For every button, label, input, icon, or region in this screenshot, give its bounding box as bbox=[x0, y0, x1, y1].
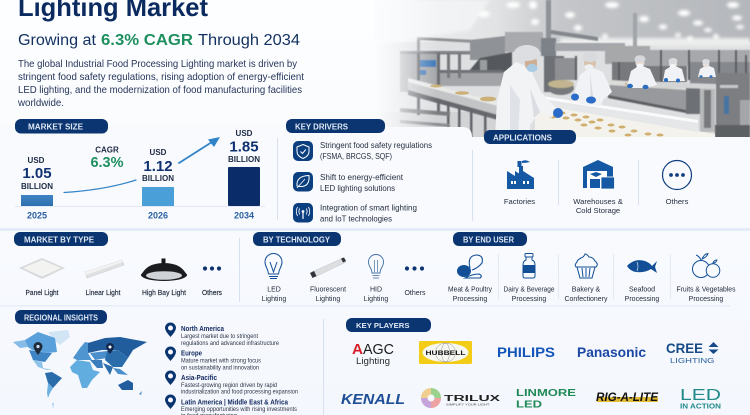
icon: meat and poultry bbox=[457, 255, 482, 278]
label: warehouses and cold storage: Cold Storage bbox=[576, 206, 620, 215]
worker 3 bbox=[627, 55, 657, 89]
heading: market by type bbox=[14, 232, 108, 246]
region: latin america, middle east and africa: Latin America | Middle East & Africa bbox=[181, 398, 289, 406]
text: led lighting: LED bbox=[267, 286, 281, 294]
text: energy efficient: LED lighting solutions bbox=[320, 184, 395, 193]
text: led lighting bbox=[262, 286, 286, 303]
bar chart: 1.05 bbox=[22, 165, 52, 182]
label: high bay light: High Bay Light bbox=[142, 290, 186, 297]
region: europe bbox=[165, 346, 261, 372]
region: north america bbox=[165, 322, 280, 347]
label: factories: Factories bbox=[504, 197, 535, 206]
subtitle: 6.3% CAGR bbox=[101, 32, 193, 49]
logo: Linmore LED: LED bbox=[516, 398, 543, 410]
logo: Trilux: TRILUX bbox=[444, 394, 501, 403]
text: seafood: Seafood bbox=[629, 286, 655, 294]
heading: by technology bbox=[253, 232, 341, 246]
heading: by end user: BY END USER bbox=[463, 236, 514, 244]
logo: Linmore LED: LINMORE bbox=[516, 387, 576, 399]
icon: linear light bbox=[85, 260, 124, 278]
icon: wireless bbox=[293, 203, 313, 222]
text: meat and poultry bbox=[448, 286, 492, 303]
logo: LED in Action: LED bbox=[680, 387, 721, 404]
region: asia-pacific: Fastest-growing region driven by rapid bbox=[181, 383, 277, 389]
photo fade bbox=[375, 0, 434, 127]
logo: AAGC Lighting: Lighting bbox=[356, 356, 390, 367]
label: others: Others bbox=[666, 197, 689, 206]
region: asia-pacific bbox=[165, 371, 298, 396]
text: regulations bbox=[320, 141, 432, 161]
region: asia-pacific: industrialization and food processing expansion bbox=[181, 390, 298, 396]
region: latin america, middle east and africa: Emerging opportunities with rising investments bbox=[181, 407, 297, 413]
worker 5 bbox=[698, 59, 716, 78]
text: meat and poultry: Processing bbox=[453, 296, 487, 303]
text: fruits and vegetables bbox=[676, 286, 736, 303]
text: smart lighting bbox=[320, 204, 417, 224]
heading: regional insights: REGIONAL INSIGHTS bbox=[24, 314, 99, 322]
panel: market by type bbox=[14, 232, 240, 302]
logo: LED in Action: IN ACTION bbox=[680, 404, 721, 410]
panel: by end user bbox=[448, 232, 736, 303]
text: bakery and confectionery: Bakery & bbox=[572, 286, 601, 294]
arrow: growth curve bbox=[64, 137, 220, 192]
label: warehouses and cold storage bbox=[573, 197, 623, 215]
icon: hid bulb bbox=[368, 254, 384, 278]
conveyor belt with pastries bbox=[430, 84, 715, 138]
logo: Hubbell bbox=[419, 341, 472, 364]
bar chart: 2026 bbox=[148, 210, 168, 220]
region: latin america, middle east and africa bbox=[165, 394, 297, 415]
bar chart: USD bbox=[236, 129, 253, 138]
panel: key players bbox=[341, 318, 721, 410]
text: fruits and vegetables: Processing bbox=[689, 296, 723, 303]
text: dairy and beverage: Processing bbox=[512, 296, 546, 303]
label: panel light: Panel Light bbox=[26, 290, 59, 297]
heading: applications bbox=[484, 130, 576, 144]
region: europe: Mature market with strong focus bbox=[181, 358, 261, 364]
text: regulations: (FSMA, BRCGS, SQF) bbox=[320, 152, 392, 161]
bar chart bbox=[15, 129, 265, 220]
text: dairy and beverage: Dairy & Beverage bbox=[504, 286, 555, 294]
logo: Trilux bbox=[421, 388, 501, 408]
icon: warehouse bbox=[583, 160, 614, 189]
icon: fish bbox=[627, 260, 657, 273]
icon: fluorescent tube bbox=[310, 258, 346, 278]
panel: regional insights bbox=[13, 310, 324, 415]
worker 1 bbox=[495, 45, 563, 138]
text: fluorescent lighting: Fluorescent bbox=[310, 286, 346, 294]
heading: by technology: BY TECHNOLOGY bbox=[263, 236, 331, 244]
icon: shield bbox=[293, 141, 313, 161]
logo: Linmore LED bbox=[516, 387, 576, 410]
bar chart: 1.12 bbox=[143, 158, 173, 175]
heading: key players: KEY PLAYERS bbox=[356, 321, 410, 330]
heading: market by type: MARKET BY TYPE bbox=[24, 236, 95, 244]
intro paragraph: The global Industrial Food Processing Lighting market is driven by bbox=[18, 59, 298, 70]
text: regulations: Stringent food safety regulations bbox=[320, 141, 432, 150]
icon: fruits and vegetables bbox=[692, 254, 720, 278]
logo: AAGC Lighting bbox=[352, 341, 394, 367]
icon: panel light bbox=[19, 258, 65, 279]
bar chart: BILLION bbox=[142, 174, 174, 183]
callout: CAGR: 6.3% bbox=[90, 155, 124, 171]
text: smart lighting: Integration of smart lighting bbox=[320, 204, 417, 212]
subtitle: Through 2034 bbox=[198, 32, 300, 49]
bar chart: 1.85 bbox=[229, 138, 259, 156]
heading: by end user bbox=[453, 232, 527, 246]
logo: Hubbell: HUBBELL bbox=[426, 350, 466, 357]
heading: applications: APPLICATIONS bbox=[493, 134, 553, 142]
heading: regional insights bbox=[15, 310, 107, 324]
label: linear light: Linear Light bbox=[86, 290, 121, 297]
text: dairy and beverage bbox=[504, 286, 555, 303]
worker 2 bbox=[571, 60, 612, 106]
logo: Trilux: SIMPLIFY YOUR LIGHT. bbox=[446, 402, 490, 406]
bar chart: BILLION bbox=[21, 182, 53, 191]
bar chart: USD bbox=[28, 156, 45, 165]
logo: LED in Action bbox=[680, 387, 721, 410]
panel: applications bbox=[472, 130, 692, 221]
photo: workers on food processing line bbox=[375, 0, 750, 138]
text: fluorescent lighting bbox=[310, 286, 346, 303]
region: north america: Largest market due to stringent bbox=[181, 334, 258, 340]
panel: top row background bbox=[0, 125, 750, 228]
label: others: Others bbox=[202, 290, 222, 297]
heading: key drivers: KEY DRIVERS bbox=[295, 122, 349, 132]
region: north america: regulations and advanced infrastructure bbox=[181, 341, 280, 347]
text: smart lighting: and IoT technologies bbox=[320, 214, 392, 224]
heading: key players bbox=[346, 318, 431, 332]
icon: factory bbox=[507, 160, 534, 189]
text: energy efficient bbox=[320, 173, 404, 193]
text: led lighting: Lighting bbox=[262, 296, 286, 303]
text: fluorescent lighting: Lighting bbox=[316, 296, 340, 303]
text: seafood bbox=[625, 286, 659, 303]
world map bbox=[13, 330, 147, 409]
bar chart: USD bbox=[150, 148, 167, 157]
intro paragraph: worldwide. bbox=[17, 98, 64, 109]
text: hid lighting: Lighting bbox=[364, 296, 388, 303]
text: meat and poultry: Meat & Poultry bbox=[448, 286, 492, 294]
callout: CAGR bbox=[90, 146, 124, 171]
text: hid lighting bbox=[364, 286, 388, 303]
logo: AAGC Lighting: A bbox=[352, 341, 363, 358]
icon: others circle bbox=[662, 160, 692, 190]
icon: bottle bbox=[523, 254, 535, 278]
bar chart: BILLION bbox=[228, 155, 260, 164]
subtitle bbox=[18, 32, 300, 49]
icon: leaf bbox=[293, 172, 313, 192]
text: energy efficient: Shift to energy-efficient bbox=[320, 173, 404, 182]
bar chart: 2034 bbox=[234, 210, 254, 220]
icon: others dots bbox=[203, 266, 221, 271]
logo: Cree Lighting: LIGHTING bbox=[670, 358, 714, 365]
logo: Cree Lighting bbox=[666, 340, 718, 365]
logo: AAGC Lighting: AGC bbox=[363, 341, 394, 358]
text: hid lighting: HID bbox=[370, 286, 382, 294]
intro paragraph: stringent food safety regulations, rising adoption of energy-efficient bbox=[18, 72, 304, 83]
region: europe: on sustainability and innovation bbox=[181, 366, 259, 372]
logo: Cree Lighting: CREE bbox=[666, 340, 703, 356]
panel: by technology bbox=[253, 232, 426, 303]
bar chart: 2025 bbox=[27, 210, 47, 220]
icon: high bay light bbox=[141, 258, 187, 281]
label: warehouses and cold storage: Warehouses & bbox=[573, 197, 623, 206]
text: bakery and confectionery: Confectionery bbox=[564, 296, 608, 303]
icon: led bulb bbox=[265, 254, 282, 278]
worker 4 bbox=[663, 58, 685, 82]
text: bakery and confectionery bbox=[564, 286, 608, 303]
label: others: Others bbox=[404, 290, 426, 297]
map pins bbox=[34, 342, 114, 355]
text: seafood: Processing bbox=[625, 296, 659, 303]
heading: market size: MARKET SIZE bbox=[28, 122, 84, 132]
logo: Panasonic: Panasonic bbox=[577, 344, 646, 360]
icon: others dots bbox=[405, 266, 424, 271]
subtitle: Growing at bbox=[18, 32, 97, 49]
logo: Philips: PHILIPS bbox=[497, 345, 555, 360]
region: europe: Europe bbox=[181, 348, 202, 358]
panel: key drivers bbox=[286, 119, 432, 224]
logo: Rig-A-Lite: RIG-A-LITE bbox=[596, 392, 658, 404]
region: asia-pacific: Asia-Pacific bbox=[181, 373, 217, 382]
region: north america: North America bbox=[181, 324, 225, 333]
logo: Kenall: KENALL bbox=[341, 392, 405, 408]
text: fruits and vegetables: Fruits & Vegetables bbox=[676, 286, 736, 294]
heading: key drivers bbox=[286, 119, 385, 133]
heading: market size bbox=[15, 119, 108, 134]
panel: market size bbox=[15, 119, 278, 220]
intro paragraph bbox=[17, 59, 304, 109]
intro paragraph: LED lighting, and the modernization of food manufacturing facilities bbox=[18, 85, 302, 96]
icon: cupcake bbox=[575, 254, 597, 278]
callout: CAGR: CAGR bbox=[95, 146, 119, 154]
machinery bbox=[400, 0, 750, 138]
